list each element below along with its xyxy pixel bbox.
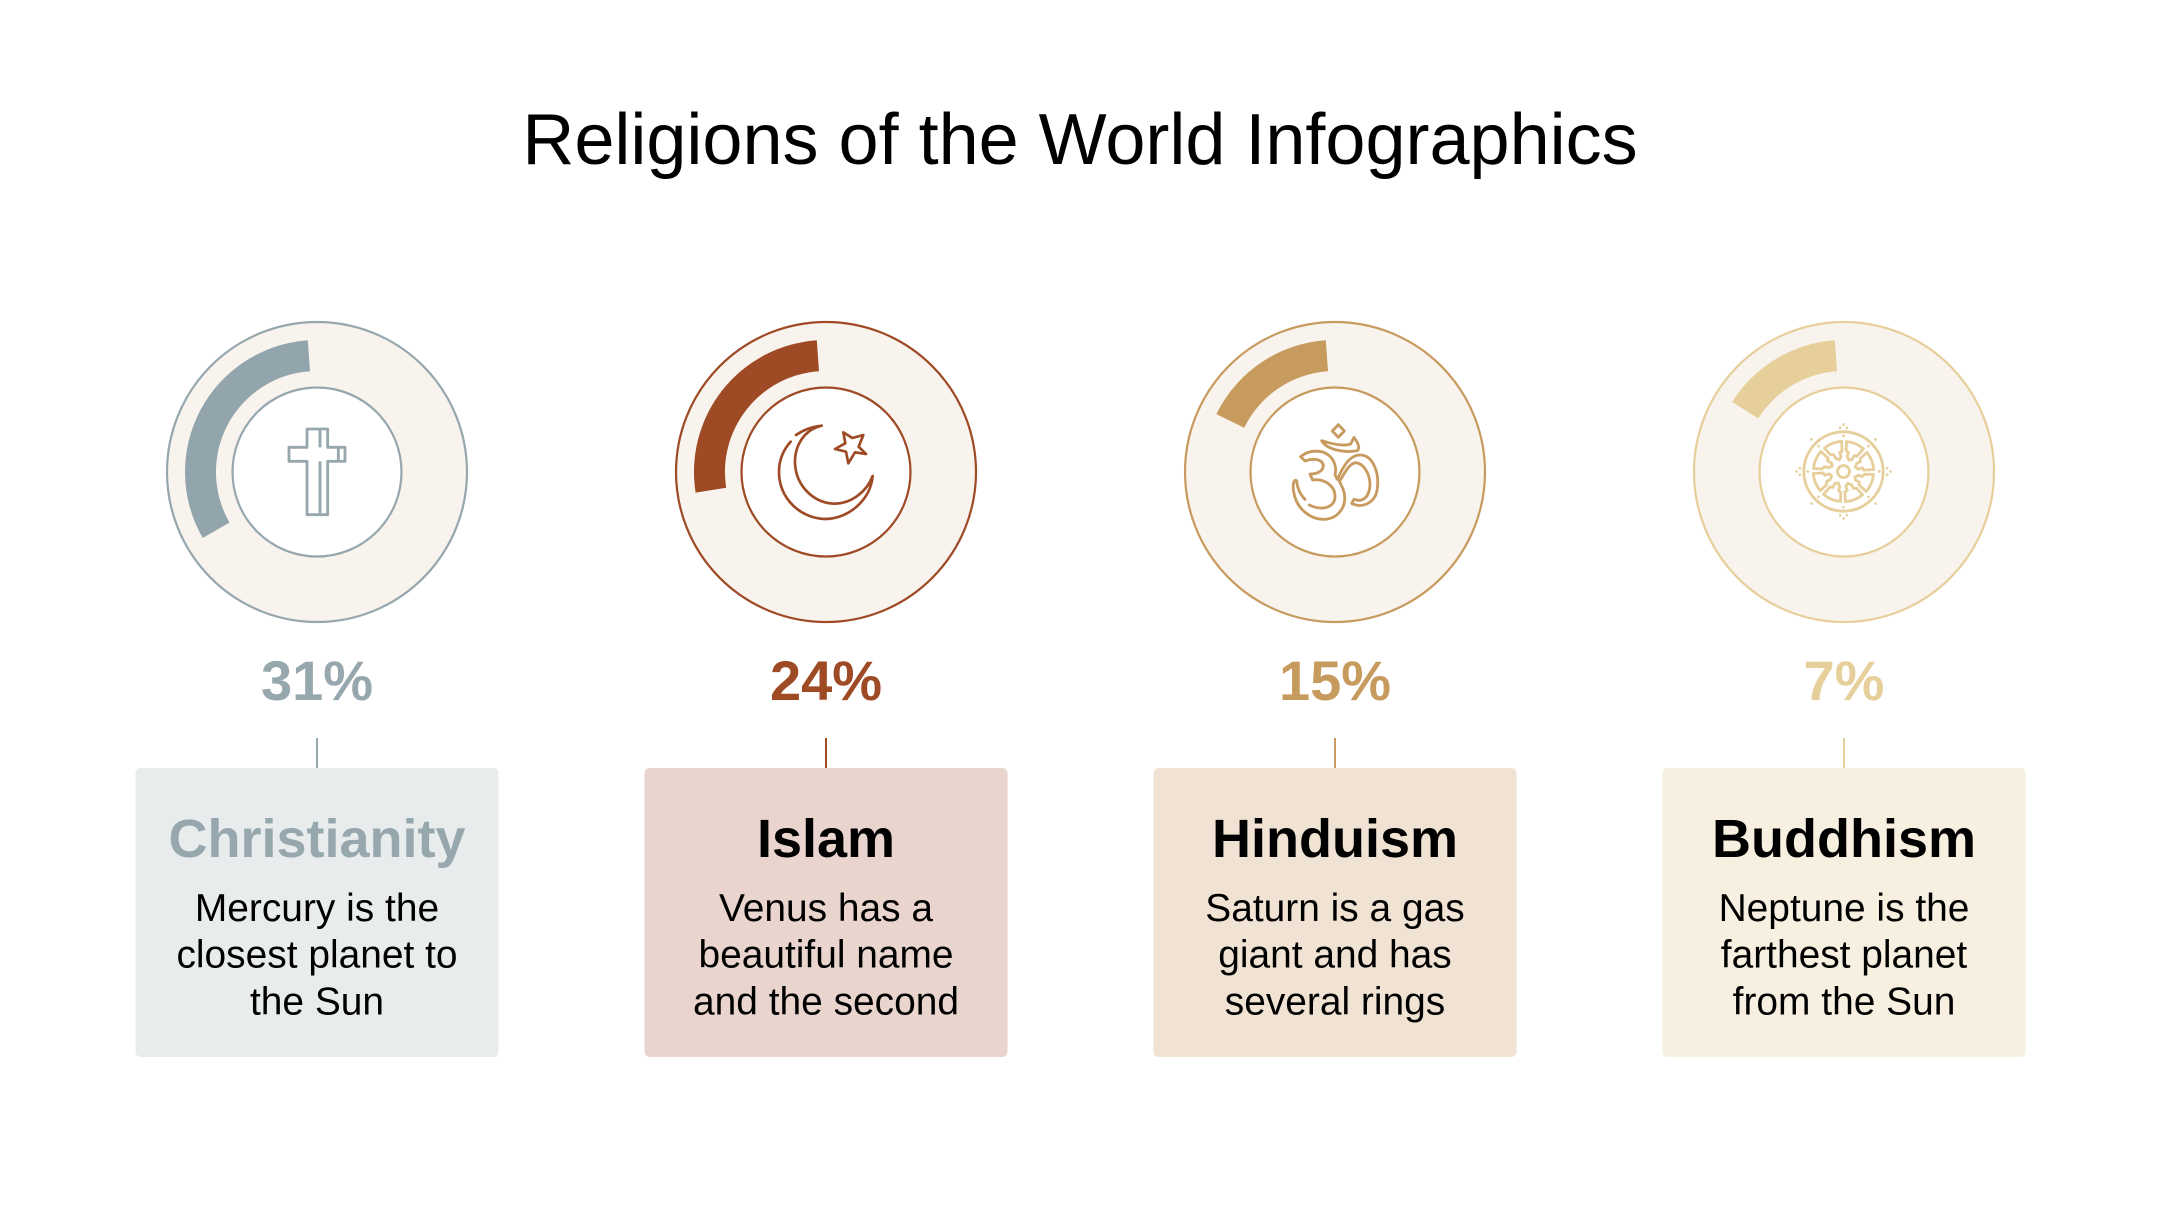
percentage: 7%: 7% xyxy=(1804,649,1884,712)
description: Islam: beautiful name xyxy=(698,934,954,977)
icon: crescent and star xyxy=(779,426,873,519)
description: Christianity: Mercury is the xyxy=(195,887,439,930)
description: Hinduism: Saturn is a gas xyxy=(1205,887,1465,930)
heading: Islam: Islam xyxy=(757,809,895,869)
description: Christianity: closest planet to xyxy=(176,934,458,977)
description: Islam: and the second xyxy=(693,980,959,1023)
icon: dharma wheel xyxy=(1795,423,1892,520)
panel: Hinduism xyxy=(1154,322,1516,1057)
connector line xyxy=(825,738,827,768)
donut chart: Buddhism 7% xyxy=(1694,322,1994,622)
info box: Islam xyxy=(644,768,1008,1057)
description: Hinduism: several rings xyxy=(1225,980,1445,1023)
donut chart: Christianity 31% xyxy=(167,322,467,622)
donut chart: Hinduism 15% xyxy=(1185,322,1485,622)
icon: cross xyxy=(289,429,345,515)
description: Hinduism: giant and has xyxy=(1218,934,1452,977)
description: Buddhism: Neptune is the xyxy=(1719,887,1969,930)
donut chart: Islam 24% xyxy=(676,322,976,622)
heading: Buddhism: Buddhism xyxy=(1712,809,1976,869)
panel: Buddhism xyxy=(1662,322,2026,1057)
percentage: 24%: 24% xyxy=(770,649,882,712)
connector line xyxy=(1843,738,1845,768)
percentage: 31%: 31% xyxy=(261,649,373,712)
connector line xyxy=(1334,738,1336,768)
description: Buddhism: farthest planet xyxy=(1721,934,1967,977)
heading: Hinduism: Hinduism xyxy=(1212,809,1458,869)
connector line xyxy=(316,738,318,768)
description: Islam: Venus has a xyxy=(719,887,933,930)
panel: Islam xyxy=(644,322,1008,1057)
info box: Christianity xyxy=(136,768,498,1057)
info box: Buddhism xyxy=(1662,768,2026,1057)
description: Buddhism: from the Sun xyxy=(1733,980,1955,1023)
title: Religions of the World Infographics xyxy=(522,100,1638,180)
percentage: 15%: 15% xyxy=(1279,649,1391,712)
description: Christianity: the Sun xyxy=(250,980,384,1023)
icon: om symbol xyxy=(1293,425,1378,519)
panel: Christianity xyxy=(136,322,498,1057)
heading: Christianity: Christianity xyxy=(168,809,466,869)
info box: Hinduism xyxy=(1154,768,1516,1057)
